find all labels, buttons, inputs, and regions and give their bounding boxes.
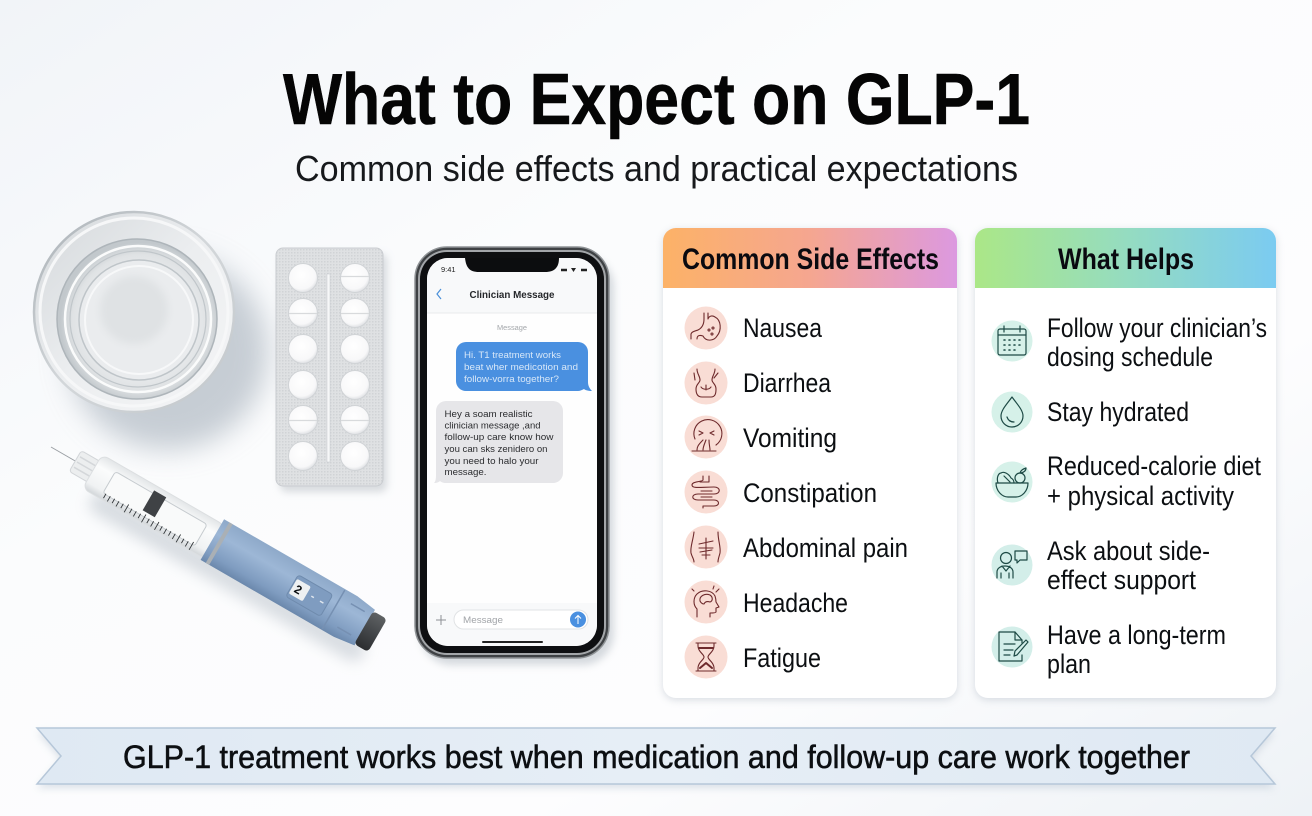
item: nausea	[684, 306, 823, 350]
header: common side effects: Common Side Effects	[682, 243, 939, 276]
panel: what helps	[975, 228, 1276, 700]
item: stay hydrated: Stay hydrated	[1047, 397, 1189, 427]
item: abdominal pain	[684, 526, 908, 568]
banner ribbon	[37, 728, 1275, 788]
sent message bubble	[456, 342, 592, 391]
item: headache	[684, 580, 848, 624]
panel: common side effects	[663, 228, 957, 700]
phone header: Clinician Message	[470, 289, 555, 301]
sent message bubble: Hi. T1 treatment works	[464, 350, 561, 361]
item: nausea: Nausea	[743, 313, 823, 343]
item: constipation	[684, 470, 877, 514]
header: what helps	[975, 228, 1276, 288]
phone header	[427, 258, 597, 313]
message input bar: Message	[463, 615, 503, 626]
item: fatigue: Fatigue	[743, 643, 821, 673]
phone header: 9:41	[441, 265, 456, 274]
received message bubble: Hey a soam realistic	[444, 409, 533, 420]
item: diarrhea	[684, 362, 832, 404]
item: long-term plan: Have a long-term	[1047, 620, 1226, 650]
message date label: Message	[497, 325, 527, 332]
received message bubble: you need to halo your	[444, 456, 538, 467]
item: stay hydrated	[992, 392, 1189, 432]
sent message bubble: follow-vorra together?	[464, 374, 559, 385]
item: constipation: Constipation	[743, 478, 877, 508]
smartphone	[415, 247, 614, 665]
sent message bubble: beat wher medicotion and	[464, 362, 578, 373]
received message bubble: follow-up care know how	[444, 432, 554, 443]
item: diet and activity: Reduced-calorie diet	[1047, 451, 1261, 481]
item: diarrhea: Diarrhea	[743, 368, 832, 398]
item: dosing schedule: Follow your clinician’s	[1047, 313, 1267, 343]
received message bubble	[434, 401, 563, 483]
item: long-term plan: plan	[1047, 649, 1091, 679]
subtitle: Common side effects and practical expectations	[295, 148, 1018, 189]
header: what helps: What Helps	[1058, 243, 1194, 276]
received message bubble: message.	[444, 467, 486, 478]
item: vomiting: Vomiting	[743, 423, 837, 453]
injector pen: 2	[292, 582, 305, 598]
item: side-effect support: Ask about side-	[1047, 536, 1210, 566]
item: dosing schedule: dosing schedule	[1047, 342, 1213, 372]
item: dosing schedule	[992, 313, 1267, 372]
item: side-effect support	[992, 536, 1210, 595]
item: diet and activity	[992, 451, 1261, 511]
item: abdominal pain: Abdominal pain	[743, 533, 908, 563]
item: diet and activity: + physical activity	[1047, 481, 1234, 511]
item: side-effect support: effect support	[1047, 565, 1196, 595]
message input bar	[427, 603, 597, 646]
item: long-term plan	[992, 620, 1226, 679]
injector pen	[33, 426, 389, 667]
glass of water	[34, 212, 268, 450]
banner text: GLP-1 treatment works best when medication and follow-up care work together	[123, 739, 1190, 775]
blister pack of pills	[276, 248, 387, 492]
received message bubble: you can sks zenidero on	[444, 444, 548, 455]
item: vomiting	[684, 416, 837, 458]
header: common side effects	[663, 228, 957, 288]
item: headache: Headache	[743, 588, 848, 618]
title: What to Expect on GLP-1	[283, 60, 1030, 140]
item: fatigue	[684, 636, 821, 678]
received message bubble: clinician message ,and	[444, 420, 540, 432]
